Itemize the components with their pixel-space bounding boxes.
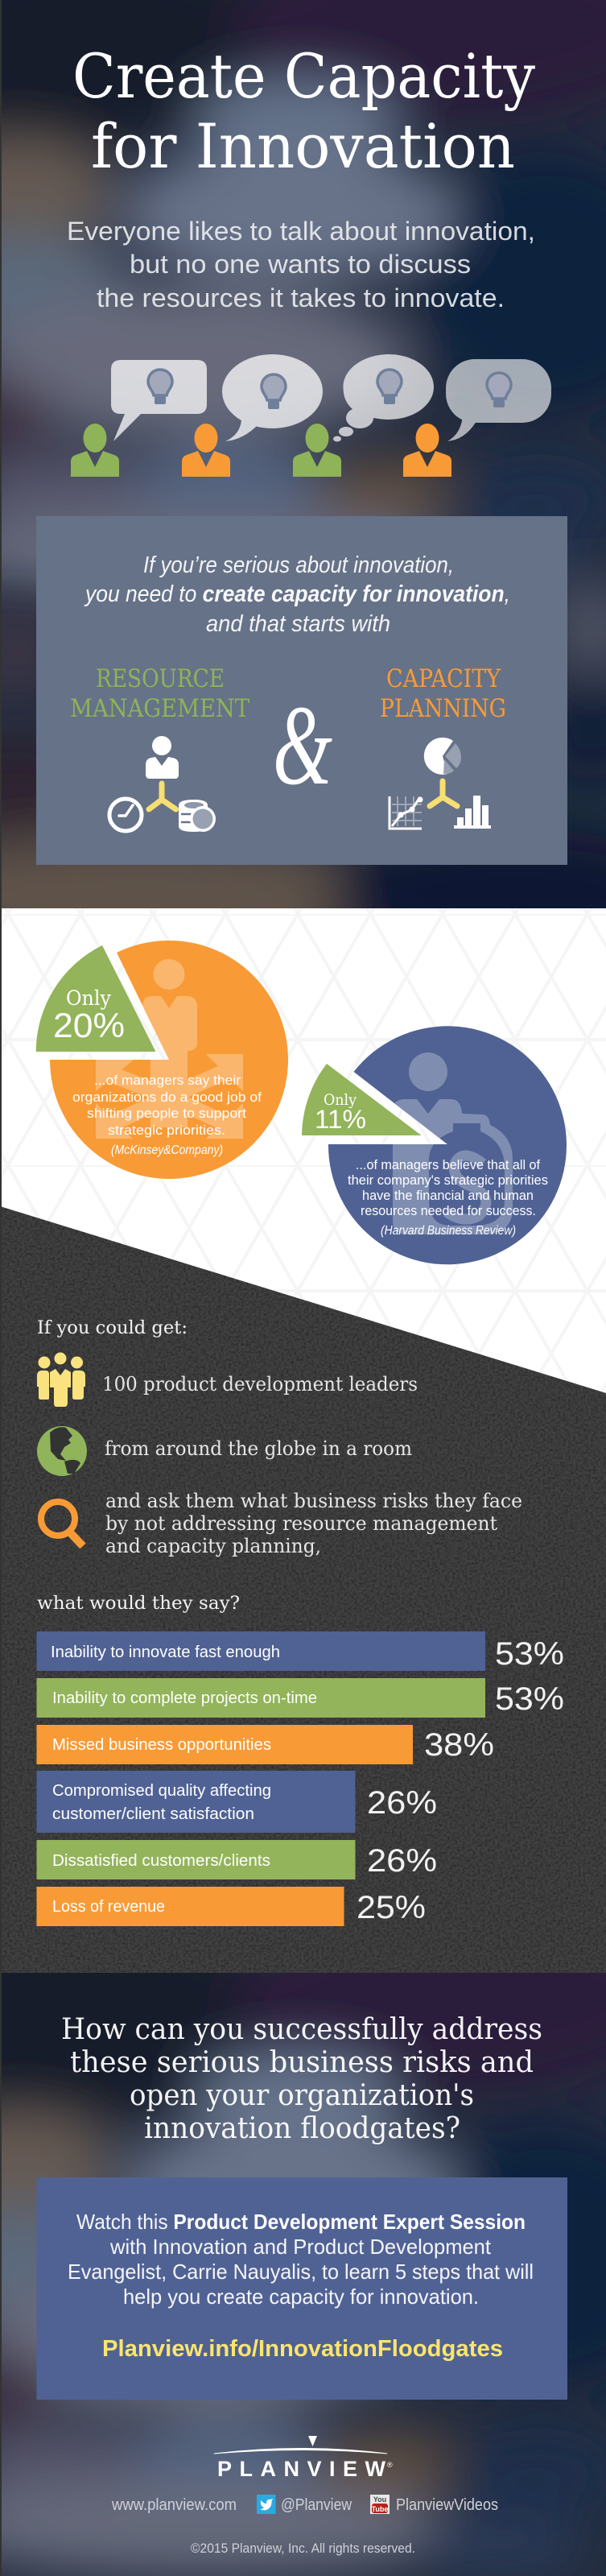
label: only 11% [315,1091,366,1134]
intro text: Everyone likes to talk about innovation, [67,217,535,246]
people icons [71,424,451,477]
bar: compromised quality: customer/client satisfaction [52,1805,254,1823]
bar: dissatisfied customers: Dissatisfied customers/clients [52,1852,270,1870]
copyright: ©2015 Planview, Inc. All rights reserved. [191,2541,415,2556]
youtube channel: PlanviewVideos [396,2496,498,2514]
pie: 11 percent of managers [302,1026,567,1264]
bar: inability to innovate: Inability to innovate fast enough [51,1644,280,1661]
planview logo [214,2436,393,2481]
closing question heading: these serious business risks and [70,2046,534,2079]
bar: loss of revenue: Loss of revenue [52,1898,165,1916]
bar: missed opportunities: 38% [424,1727,494,1763]
speech bubble 2 [222,354,323,441]
pie text: (Harvard Business Review) [381,1224,516,1238]
bar: compromised quality [37,1771,437,1833]
bar: compromised quality: 26% [367,1785,437,1821]
panel intro text: and that starts with [206,611,390,637]
heading: resource management: RESOURCE [96,664,225,693]
pie text [348,1158,548,1238]
heading: resource management: MANAGEMENT [70,694,249,723]
bar: inability to innovate: 53% [495,1636,564,1672]
pie: 20 percent of managers [36,941,288,1179]
label: only 11%: 11% [315,1105,366,1134]
label: only 11%: Only [324,1091,357,1109]
survey intro heading: If you could get: [37,1318,188,1338]
icon: resource management [109,736,216,832]
title: for Innovation [91,110,515,182]
closing question heading [61,2013,542,2145]
session description: help you create capacity for innovation. [123,2284,479,2309]
text: business risks question: by not addressing resource management [105,1512,497,1535]
twitter handle: @Planview [281,2496,352,2514]
bar: inability to complete projects: Inability to complete projects on-time [52,1689,317,1707]
icon: ghost person with dollar [393,1052,513,1234]
footer links [111,2495,498,2514]
bar chart [37,1631,564,1926]
planview logo: PLANVIEW [217,2457,386,2481]
closing question heading: innovation floodgates? [144,2112,460,2145]
bar: inability to complete projects [37,1678,564,1718]
session description: with Innovation and Product Development [109,2235,492,2259]
pie text: have the financial and human [362,1189,534,1203]
bar: inability to innovate [37,1631,564,1672]
pie text: strategic priorities. [108,1123,225,1138]
panel: resource management and capacity planning [36,516,567,865]
icon: globe [37,1426,87,1476]
planview logo: ® [387,2461,393,2469]
heading: what would they say: what would they say? [37,1594,240,1614]
text: business risks question [105,1490,522,1557]
bar: loss of revenue: 25% [357,1890,426,1925]
text: from around the globe: from around the globe in a room [105,1437,412,1460]
heading: capacity planning: PLANNING [380,694,506,723]
closing question heading: open your organization's [130,2079,474,2112]
session description: Evangelist, Carrie Nauyalis, to learn 5 steps that will [68,2260,534,2284]
icon: magnifying glass [41,1502,83,1546]
bar: inability to complete projects: 53% [495,1681,564,1717]
pie text: (McKinsey&Company) [111,1143,223,1157]
speech bubble 4 [446,359,551,441]
panel intro text: you need to create capacity for innovation, [84,581,510,607]
top section background [0,0,606,962]
intro text [67,217,535,312]
intro text: but no one wants to discuss [130,250,471,279]
speech bubbles with people [71,354,551,477]
icon: youtube: Tube [372,2505,388,2513]
icon: capacity planning [390,738,491,829]
pie text: resources needed for success. [361,1204,536,1218]
page border [0,0,2,2576]
speech bubble 1 [111,360,207,441]
text: business risks question: and capacity planning, [105,1535,321,1557]
intro text: the resources it takes to innovate. [97,283,505,312]
thought bubble 3 [333,354,434,441]
title: Create Capacity [72,40,535,112]
green slice [36,945,156,1052]
panel intro text [84,552,510,637]
bar: dissatisfied customers [37,1840,437,1879]
icon: twitter [257,2495,275,2514]
icon: ghost person with arrows [96,959,243,1139]
dark textured section background [0,1206,606,1973]
pie text: organizations do a good job of [72,1090,262,1105]
icon: group of people [37,1353,85,1407]
pie text: ...of managers say their [94,1073,241,1088]
pie text: their company's strategic priorities [348,1173,548,1188]
pie text: ...of managers believe that all of [356,1158,540,1172]
text: business risks question: and ask them what business risks they face [105,1490,522,1512]
website: www.planview.com [111,2496,237,2514]
text: 100 leaders: 100 product development leaders [102,1373,418,1396]
session description [68,2210,534,2309]
label: only 20%: 20% [53,1007,125,1045]
icon: youtube [370,2495,390,2514]
call to action panel [37,2177,567,2400]
session description: Watch this Product Development Expert Session [76,2210,526,2234]
label: only 20%: Only [66,986,112,1010]
pie text: shifting people to support [87,1106,246,1121]
label: only 20% [53,986,125,1045]
ampersand: & [273,681,332,808]
heading: resource management [70,664,249,723]
bar: missed opportunities: Missed business opportunities [52,1736,271,1754]
lightbulb icons [148,370,511,409]
pie text [72,1073,262,1157]
closing question heading: How can you successfully address [61,2013,542,2046]
icon: youtube: You [373,2495,386,2504]
link: Planview.info/InnovationFloodgates [102,2336,503,2362]
green slice [302,1064,422,1135]
bar: missed opportunities [37,1725,494,1764]
bar: compromised quality: Compromised quality affecting [52,1782,271,1800]
heading: capacity planning [380,664,506,723]
bar: dissatisfied customers: 26% [367,1843,437,1879]
white section background [0,908,606,1408]
bar: loss of revenue [37,1887,426,1926]
heading: capacity planning: CAPACITY [386,664,501,693]
bottom section background [2,1973,606,2576]
title [72,40,535,182]
panel intro text: If you’re serious about innovation, [143,552,454,578]
